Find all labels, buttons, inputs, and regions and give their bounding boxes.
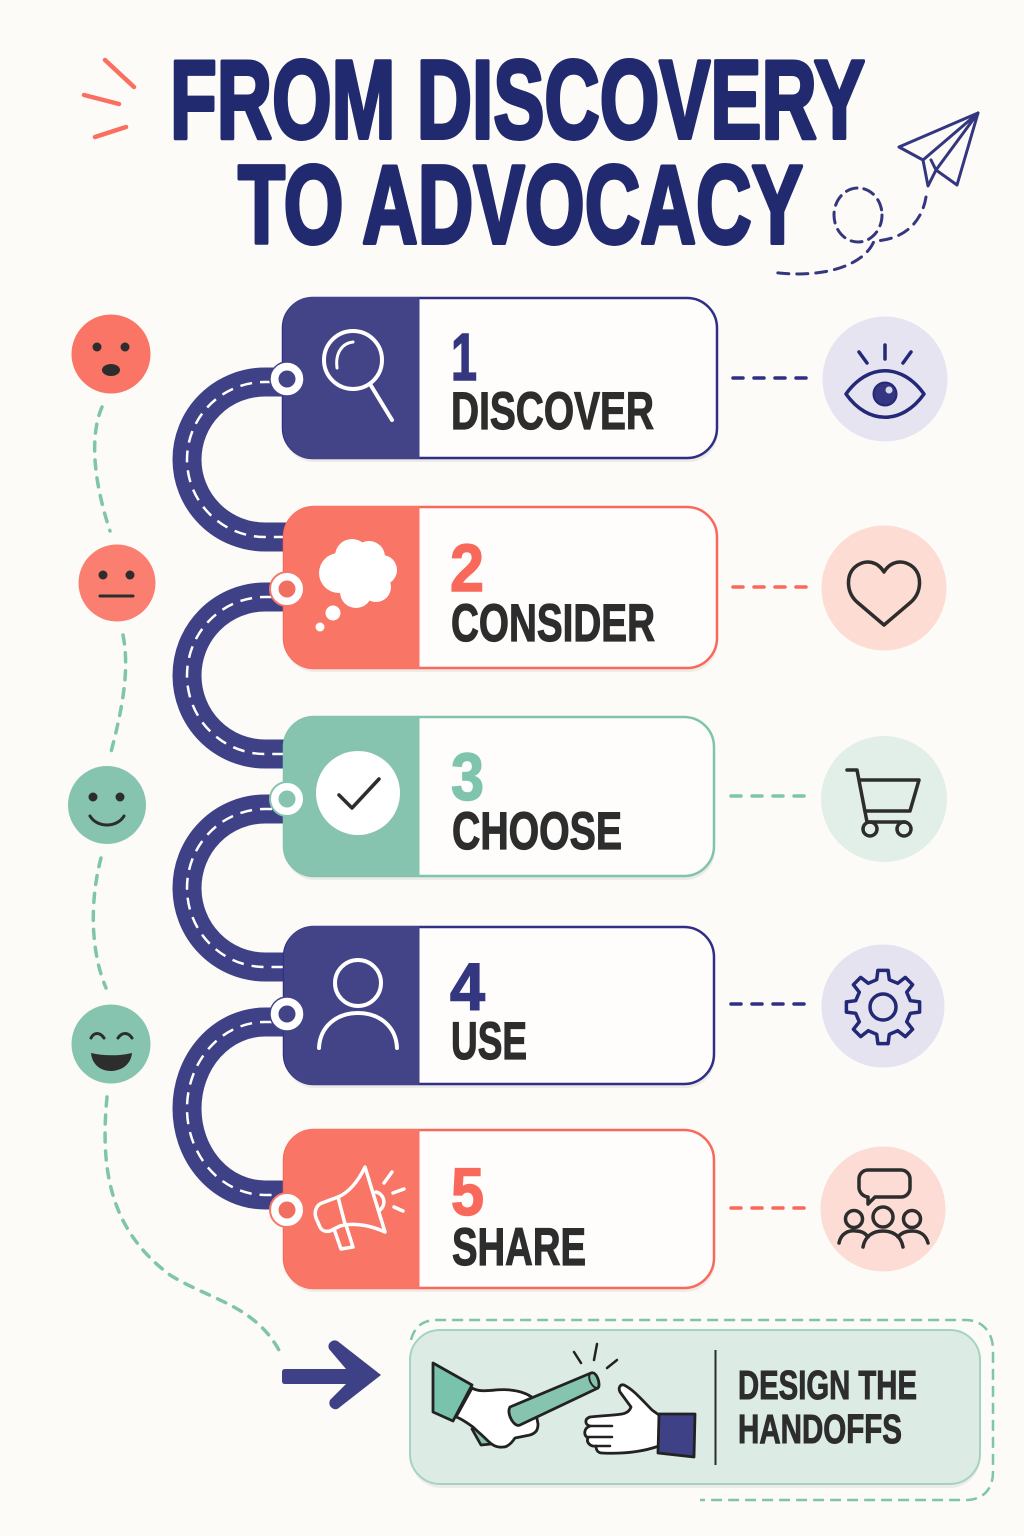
handoff text [738, 1362, 917, 1452]
icon: gear in circle [822, 944, 944, 1068]
step number 5: 5 [451, 1155, 484, 1230]
icon: thought cloud [316, 539, 397, 632]
handoff text: HANDOFFS [738, 1406, 902, 1452]
panel: step 4 use [284, 926, 715, 1088]
step label use: USE [451, 1012, 527, 1071]
emotion trail dashes [93, 407, 280, 1352]
connector dashes [731, 378, 808, 1208]
step label share: SHARE [452, 1218, 586, 1277]
road: consider to choose [187, 597, 287, 754]
icon: smiling face [68, 766, 146, 844]
step number 2: 2 [450, 531, 484, 606]
road: discover to consider [187, 382, 287, 537]
icon: magnifier [324, 331, 392, 420]
panel: step 1 discover [283, 297, 718, 462]
step label choose: CHOOSE [452, 802, 622, 861]
icon: worried face [72, 314, 150, 394]
icon: community speech in circle [820, 1146, 946, 1272]
icon: coral spark ticks [84, 60, 134, 137]
icon: user [319, 960, 397, 1048]
handoff text: DESIGN THE [738, 1362, 917, 1408]
road connectors [187, 382, 287, 1195]
icon: megaphone [315, 1167, 404, 1249]
step number 4: 4 [450, 950, 485, 1025]
icon: neutral face [78, 544, 156, 622]
panel: step 2 consider [284, 506, 718, 672]
icon: check badge [316, 751, 400, 835]
icon: sparks [574, 1344, 617, 1368]
icon: baton handoff hands [433, 1363, 695, 1457]
arrow to handoff panel [282, 1340, 381, 1409]
dashed frame [411, 1320, 993, 1500]
panel: step 3 choose [284, 716, 715, 880]
step number 1: 1 [451, 320, 477, 395]
icon: cart in circle [821, 736, 947, 862]
step label discover: DISCOVER [451, 382, 654, 441]
road: choose to use [187, 809, 287, 967]
icon: paper plane with dashed trail [770, 113, 978, 274]
title [170, 38, 865, 267]
icon: delighted face [72, 1004, 150, 1084]
panel: step 5 share [284, 1129, 715, 1292]
icon: eye in circle [822, 316, 948, 442]
step number 3: 3 [451, 740, 484, 815]
step label consider: CONSIDER [451, 594, 655, 653]
hook rings [270, 362, 304, 1227]
road: use to share [187, 1022, 287, 1195]
panel: design the handoffs [410, 1320, 993, 1500]
divider [714, 1350, 716, 1465]
icon: heart in circle [822, 526, 946, 650]
